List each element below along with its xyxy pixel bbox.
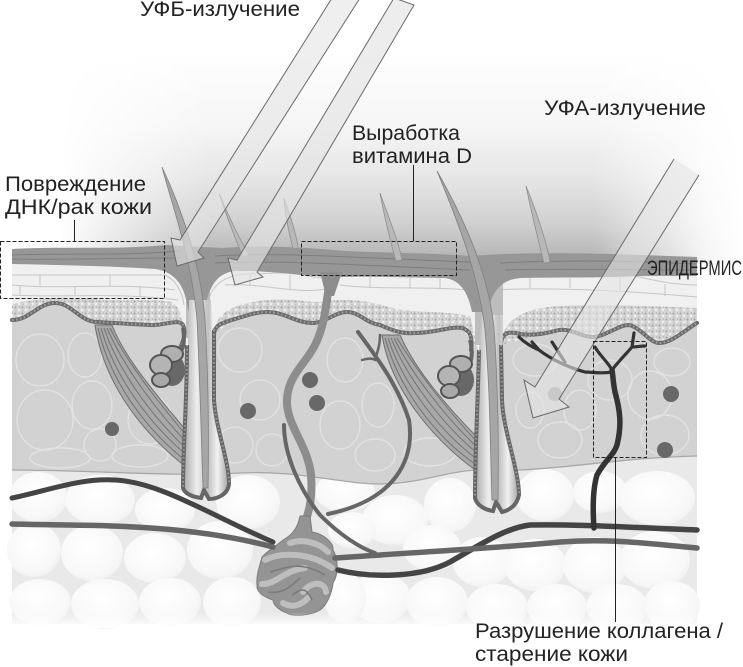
leader: vitamin D [412,165,414,241]
icon: sweat gland and duct [257,272,342,615]
label: collagen destruction and skin aging: старение кожи [475,643,628,666]
label: UVA radiation: УФА-излучение [544,97,706,120]
icon: arrector pili muscle right [382,335,478,472]
label: DNA damage and skin cancer: ДНК/рак кожи [5,196,152,219]
callout: vitamin D zone [302,242,456,276]
leader: DNA damage [74,220,76,241]
callout: DNA damage zone [0,242,164,298]
arrow: UVB ray 2 [228,0,414,285]
icon: vellus hairs [219,186,550,263]
icon: hair follicle left [162,167,229,499]
label: DNA damage and skin cancer: Повреждение [5,173,146,196]
icon: arrector pili muscle left [95,325,190,470]
label: vitamin D production: Выработка [352,122,460,145]
icon: cells in dermis [105,372,679,458]
leader: collagen [614,458,616,622]
icon: sebaceous gland left [150,328,185,387]
background: funnel columns around hairs [186,268,503,345]
panel: dermis layer [12,303,697,484]
background: bottom fade of skin [0,612,743,628]
icon: blood vessels and nerves [12,332,697,575]
panel: epidermis band [12,245,697,312]
arrow: UVB ray 1 [171,0,360,266]
panel: stratum layers [12,262,697,350]
icon: dermal vessel tree [519,333,645,528]
label: vitamin D production: витамина D [352,145,472,168]
icon: sebaceous gland right [438,340,474,398]
icon: basement membrane [12,303,697,350]
icon: hair follicle right [437,171,519,512]
arrow: UVA ray [524,159,699,418]
label: collagen destruction and skin aging: Разрушение коллагена / [475,620,723,643]
panel: hypodermis fat layer [7,450,700,630]
background: gray glow above the skin [78,117,713,264]
callout: collagen zone [594,342,646,458]
